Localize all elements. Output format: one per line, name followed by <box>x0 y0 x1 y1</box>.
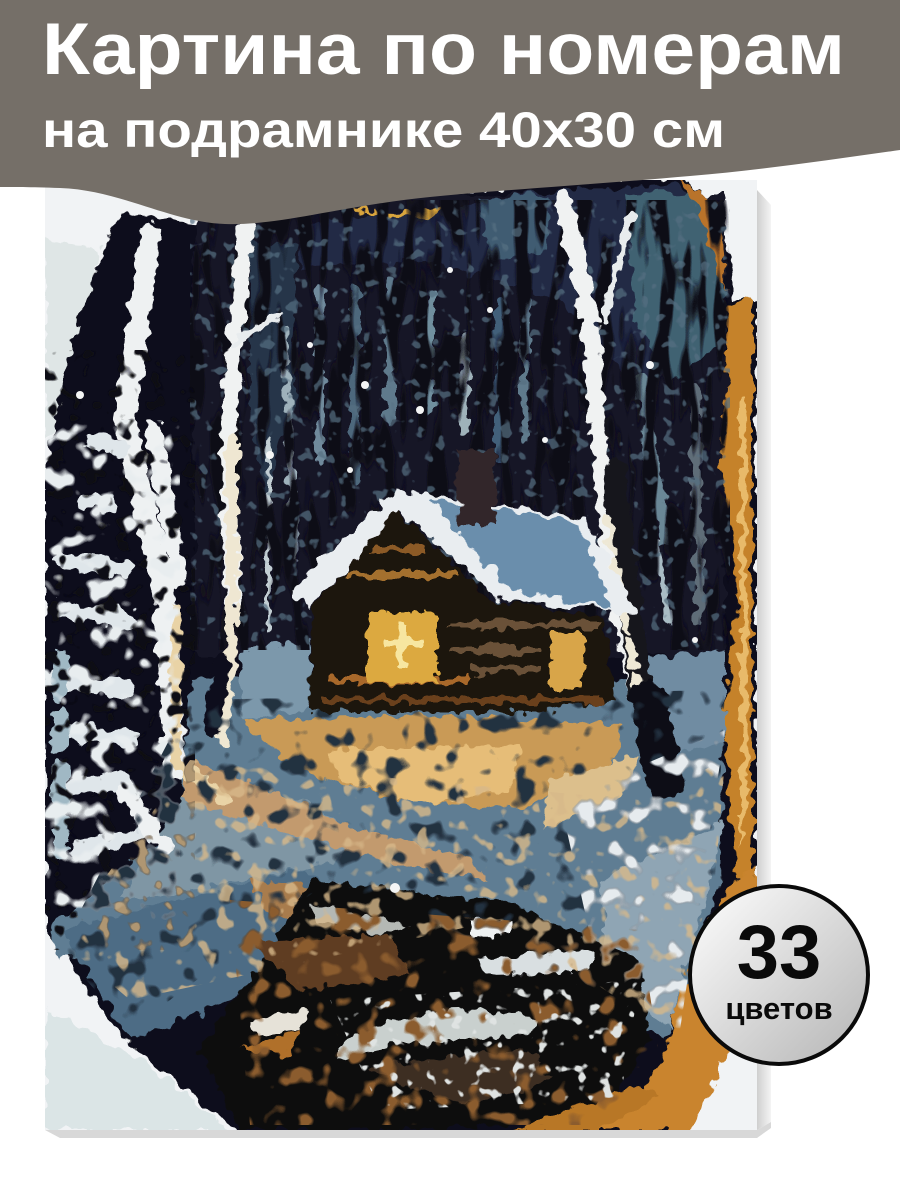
left tree mottling <box>45 350 195 950</box>
white snow corners tint <box>45 240 230 1130</box>
cabin front window <box>367 612 437 682</box>
cabin side window <box>550 634 584 688</box>
center-left birch <box>212 228 280 740</box>
chimney <box>458 450 497 525</box>
badge: 33 colours <box>690 886 868 1064</box>
snowflakes <box>76 267 698 893</box>
gable logs <box>320 550 600 700</box>
title: Картина по номерам <box>42 9 845 90</box>
cabin blue roof <box>430 500 610 608</box>
forest background <box>195 185 725 655</box>
badge label: цветов <box>725 991 833 1026</box>
painting: winter cabin in birch forest <box>45 176 757 1135</box>
left birch trunks <box>55 235 225 850</box>
dark vignette <box>45 176 757 1135</box>
cabin roof snow <box>290 490 640 615</box>
canvas side edge and shadow <box>45 190 771 1138</box>
ground blue snow <box>50 640 725 1040</box>
right birch <box>563 200 665 780</box>
right orange strip <box>510 180 757 1130</box>
badge number: 33 <box>737 910 821 995</box>
forest mottling <box>190 200 730 650</box>
header banner <box>0 0 900 224</box>
foreground rock mottling <box>230 900 660 1125</box>
subtitle: на подрамнике 40х30 см <box>42 102 725 158</box>
golden path <box>180 715 640 925</box>
ground mottling <box>60 690 725 1030</box>
dark foreground rocks <box>200 880 660 1130</box>
cabin log wall <box>310 510 615 712</box>
log cabin <box>290 450 640 712</box>
